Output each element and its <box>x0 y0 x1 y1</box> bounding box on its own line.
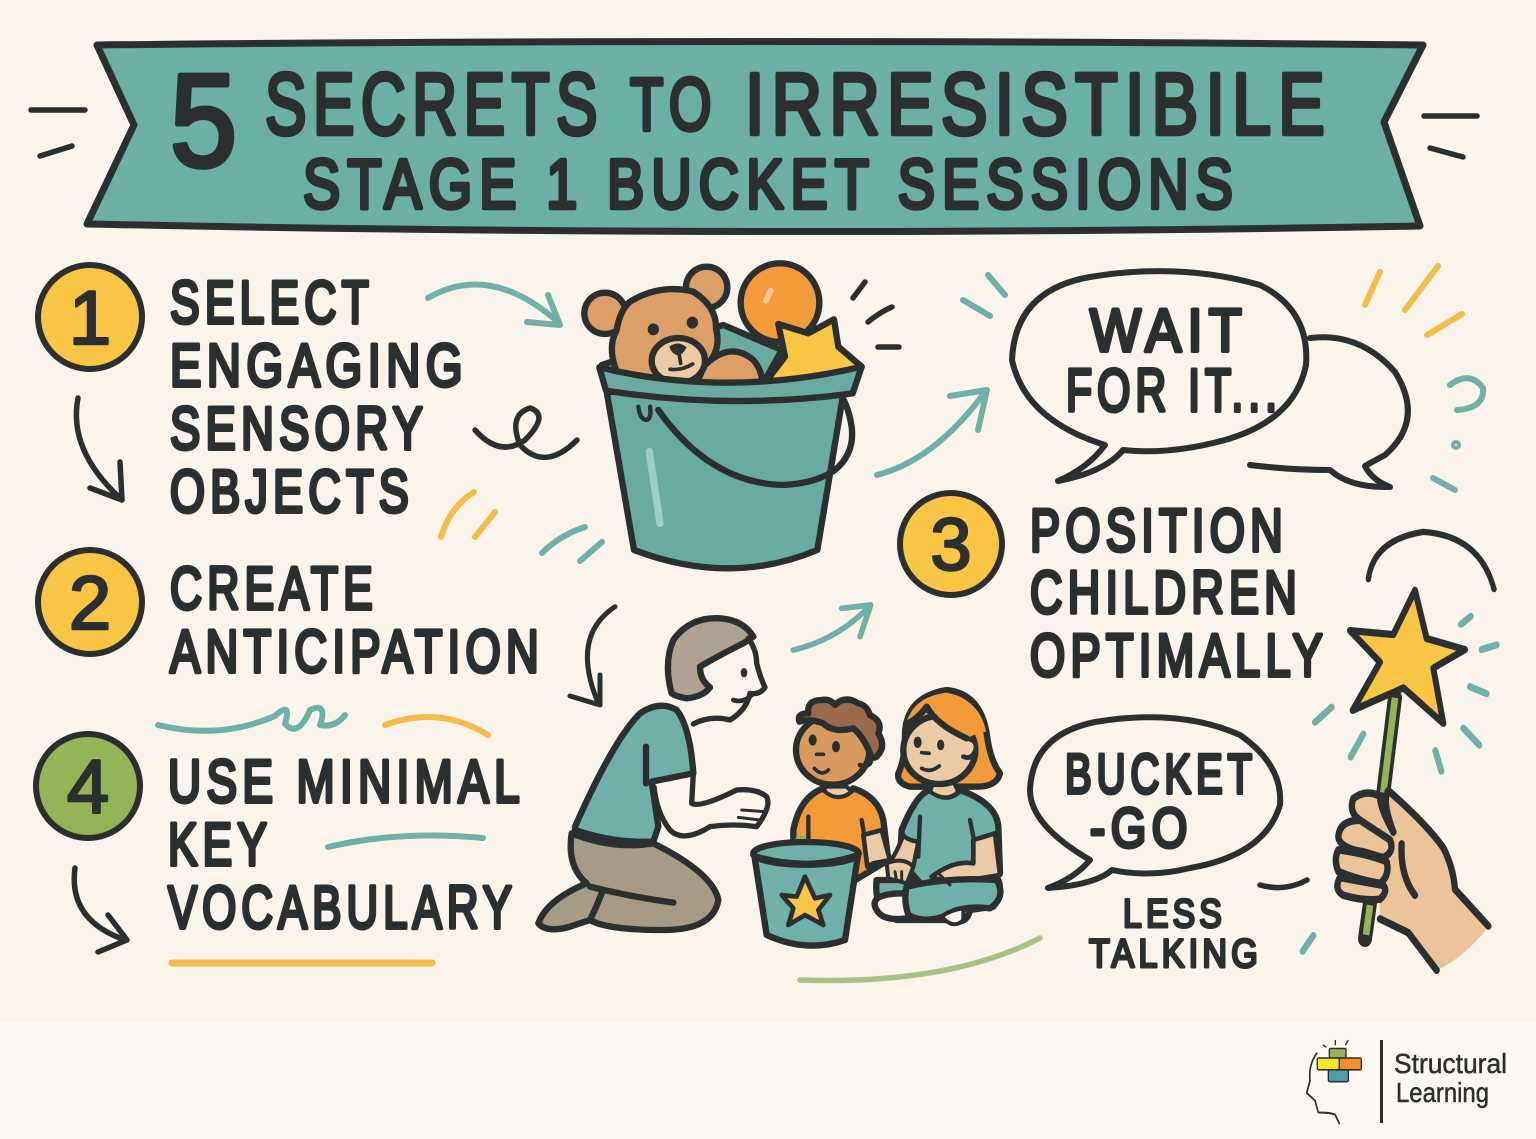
teal question mark doodle <box>1433 378 1483 490</box>
step 3 text <box>1030 497 1328 689</box>
teal accent marks by bucket <box>542 527 602 561</box>
motion lines by bucket <box>853 282 899 347</box>
step 3 number badge: 3 <box>930 503 972 586</box>
title banner: STAGE 1 BUCKET SESSIONS <box>303 145 1240 223</box>
less talking label: LESS <box>1123 892 1226 936</box>
step 1 number badge: 1 <box>69 276 111 361</box>
teal underline <box>328 835 483 847</box>
step 1 text: OBJECTS <box>170 458 414 525</box>
title banner <box>87 42 1423 232</box>
arrow: step 1 to step 2 <box>76 398 122 500</box>
step 4 text: KEY <box>168 811 272 878</box>
yellow accent marks <box>441 492 495 537</box>
logo: Structural Learning <box>1307 1040 1507 1124</box>
teal marks by bubble <box>963 275 1005 316</box>
speech bubble: wait for it <box>1012 271 1408 487</box>
arrow: step 1 to bucket <box>428 284 560 325</box>
step 2 text <box>170 555 544 685</box>
title banner: 5 <box>170 47 237 194</box>
speech bubble: wait for it: FOR IT... <box>1066 357 1282 424</box>
speech bubble: bucket go: -GO <box>1090 796 1193 859</box>
decorative wave lines <box>158 708 488 735</box>
logo: Structural Learning: Learning <box>1396 1077 1489 1108</box>
dash near hand <box>1260 880 1307 888</box>
arrow: bucket to wait bubble <box>877 390 987 475</box>
step 3 number badge <box>900 493 1002 595</box>
step 3 text: CHILDREN <box>1030 559 1302 626</box>
step 1 text <box>170 269 468 525</box>
step 4 text <box>168 748 525 941</box>
step 2 number badge <box>38 550 142 654</box>
illustration: adult and children with bucket <box>538 605 1000 946</box>
step 1 text: SELECT <box>170 269 374 336</box>
logo: Structural Learning: Structural <box>1394 1048 1507 1079</box>
title banner: SECRETS <box>265 56 604 153</box>
title banner: TO <box>630 63 718 146</box>
step 1 text: SENSORY <box>170 395 428 462</box>
speech bubble: bucket go <box>1030 717 1280 888</box>
step 3 text: OPTIMALLY <box>1030 622 1328 689</box>
title banner: IRRESISTIBILE <box>745 56 1332 153</box>
arrow: below step 4 <box>74 868 127 952</box>
illustration: bucket of toys <box>584 263 862 568</box>
step 2 text: ANTICIPATION <box>170 618 544 685</box>
step 4 text: USE MINIMAL <box>168 748 525 815</box>
yellow underline <box>172 960 432 966</box>
squiggle <box>475 408 577 457</box>
less talking label <box>1089 892 1262 976</box>
less talking label: TALKING <box>1089 932 1262 976</box>
step 3 text: POSITION <box>1030 497 1288 564</box>
step 4 number badge <box>36 734 140 838</box>
speech bubble: bucket go: BUCKET <box>1065 742 1257 805</box>
step 4 number badge: 4 <box>67 745 109 830</box>
illustration: hand holding star wand <box>1303 532 1497 970</box>
green curve <box>800 938 1040 980</box>
banner side dashes <box>31 110 1477 157</box>
accent marks top right <box>1365 266 1462 335</box>
step 1 text: ENGAGING <box>170 332 468 399</box>
step 2 number badge: 2 <box>69 561 111 646</box>
step 2 text: CREATE <box>170 555 378 622</box>
step 1 number badge <box>38 265 142 369</box>
step 4 text: VOCABULARY <box>168 874 517 941</box>
speech bubble: wait for it: WAIT <box>1090 297 1248 364</box>
